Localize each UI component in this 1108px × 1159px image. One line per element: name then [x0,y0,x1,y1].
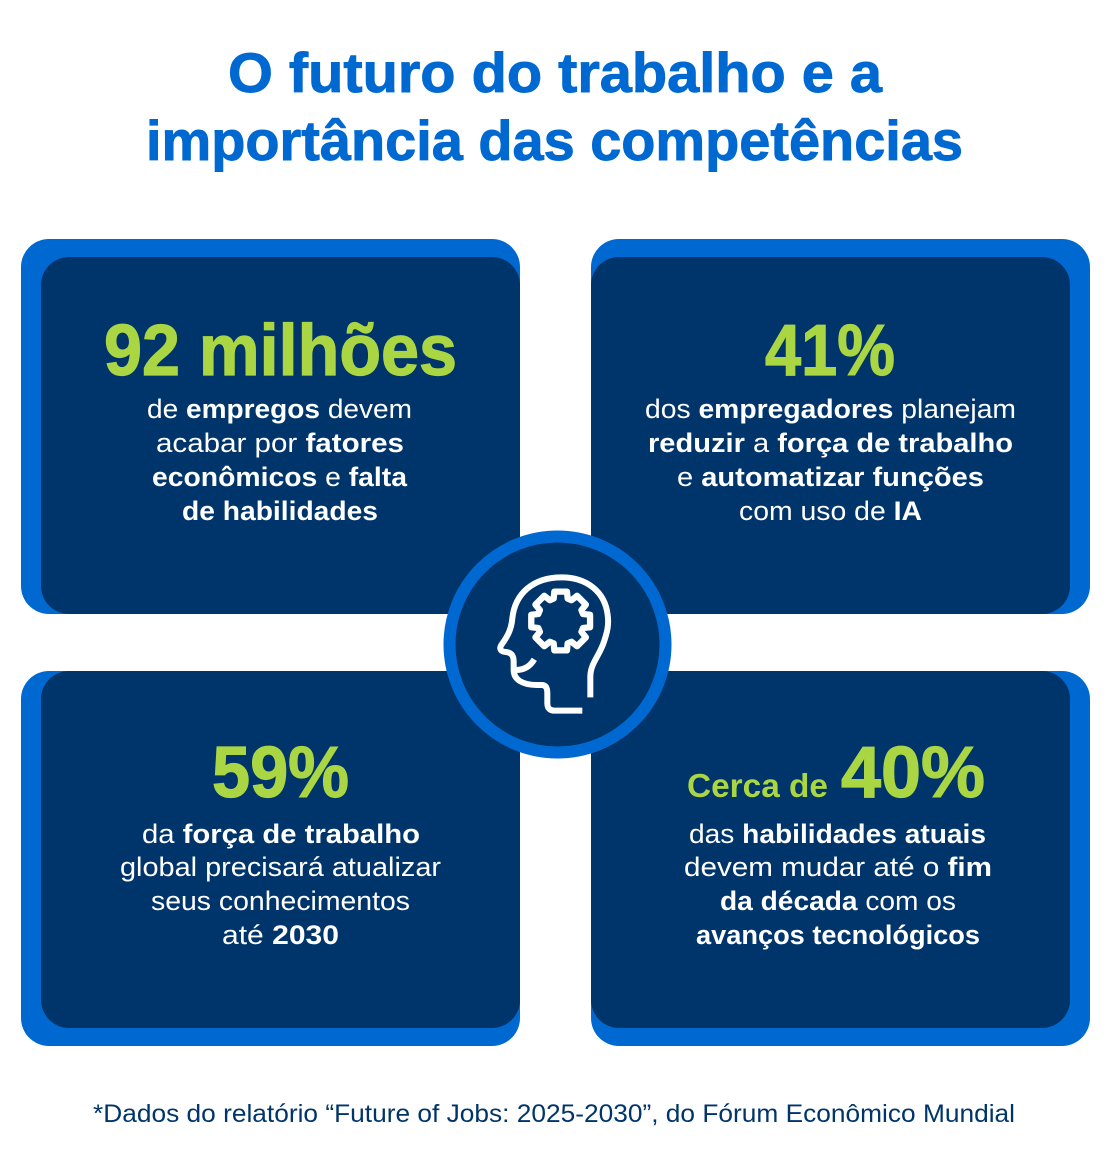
text block: 92 milhões description: de habilidades [182,496,378,526]
text block: 59% description: seus conhecimentos [151,886,410,916]
text block: 41% description: com uso de IA [739,496,922,526]
title: O futuro do trabalho e a [228,41,883,104]
stat: cerca de 40% [687,733,985,813]
title: importância das competências [146,109,963,172]
text block: 41% description: reduzir a força de trabalho [648,428,1013,458]
text block: 92 milhões description: econômicos e falta [152,462,408,492]
text block: 92 milhões description: acabar por fatores [156,428,404,458]
title [146,41,963,172]
stat: cerca de 40%: 40% [841,733,985,813]
text block: 59% description: global precisará atualizar [120,852,441,882]
footnote: *Dados do relatório “Future of Jobs: 2025-2030”, do Fórum Econômico Mundial [93,1100,1015,1128]
text block: 92 milhões description [147,394,412,526]
panel: 40% [591,671,1090,1046]
text block: 92 milhões description: de empregos devem [147,394,412,424]
text block: 40% description [684,819,992,950]
icon: head with gear [500,577,608,711]
text block: 59% description [120,819,441,950]
text block: 40% description: devem mudar até o fim [684,852,992,882]
text block: 59% description: da força de trabalho [142,819,420,849]
panel: 92 milhões [21,239,520,614]
panel: 59% [21,671,520,1046]
text block: 40% description: avanços tecnológicos [696,920,980,950]
center badge [450,536,666,752]
text block: 40% description: das habilidades atuais [689,819,986,849]
text block: 41% description: e automatizar funções [677,462,984,492]
text block: 41% description [645,394,1016,526]
panel: 41% [591,239,1090,614]
stat: 41%: 41% [765,311,895,391]
stat: cerca de 40%: Cerca de [687,767,828,804]
stat: 92 milhões: 92 milhões [104,311,457,391]
text block: 41% description: dos empregadores planejam [645,394,1016,424]
stat: 59%: 59% [212,733,349,813]
text block: 59% description: até 2030 [222,920,339,950]
text block: 40% description: da década com os [720,886,956,916]
